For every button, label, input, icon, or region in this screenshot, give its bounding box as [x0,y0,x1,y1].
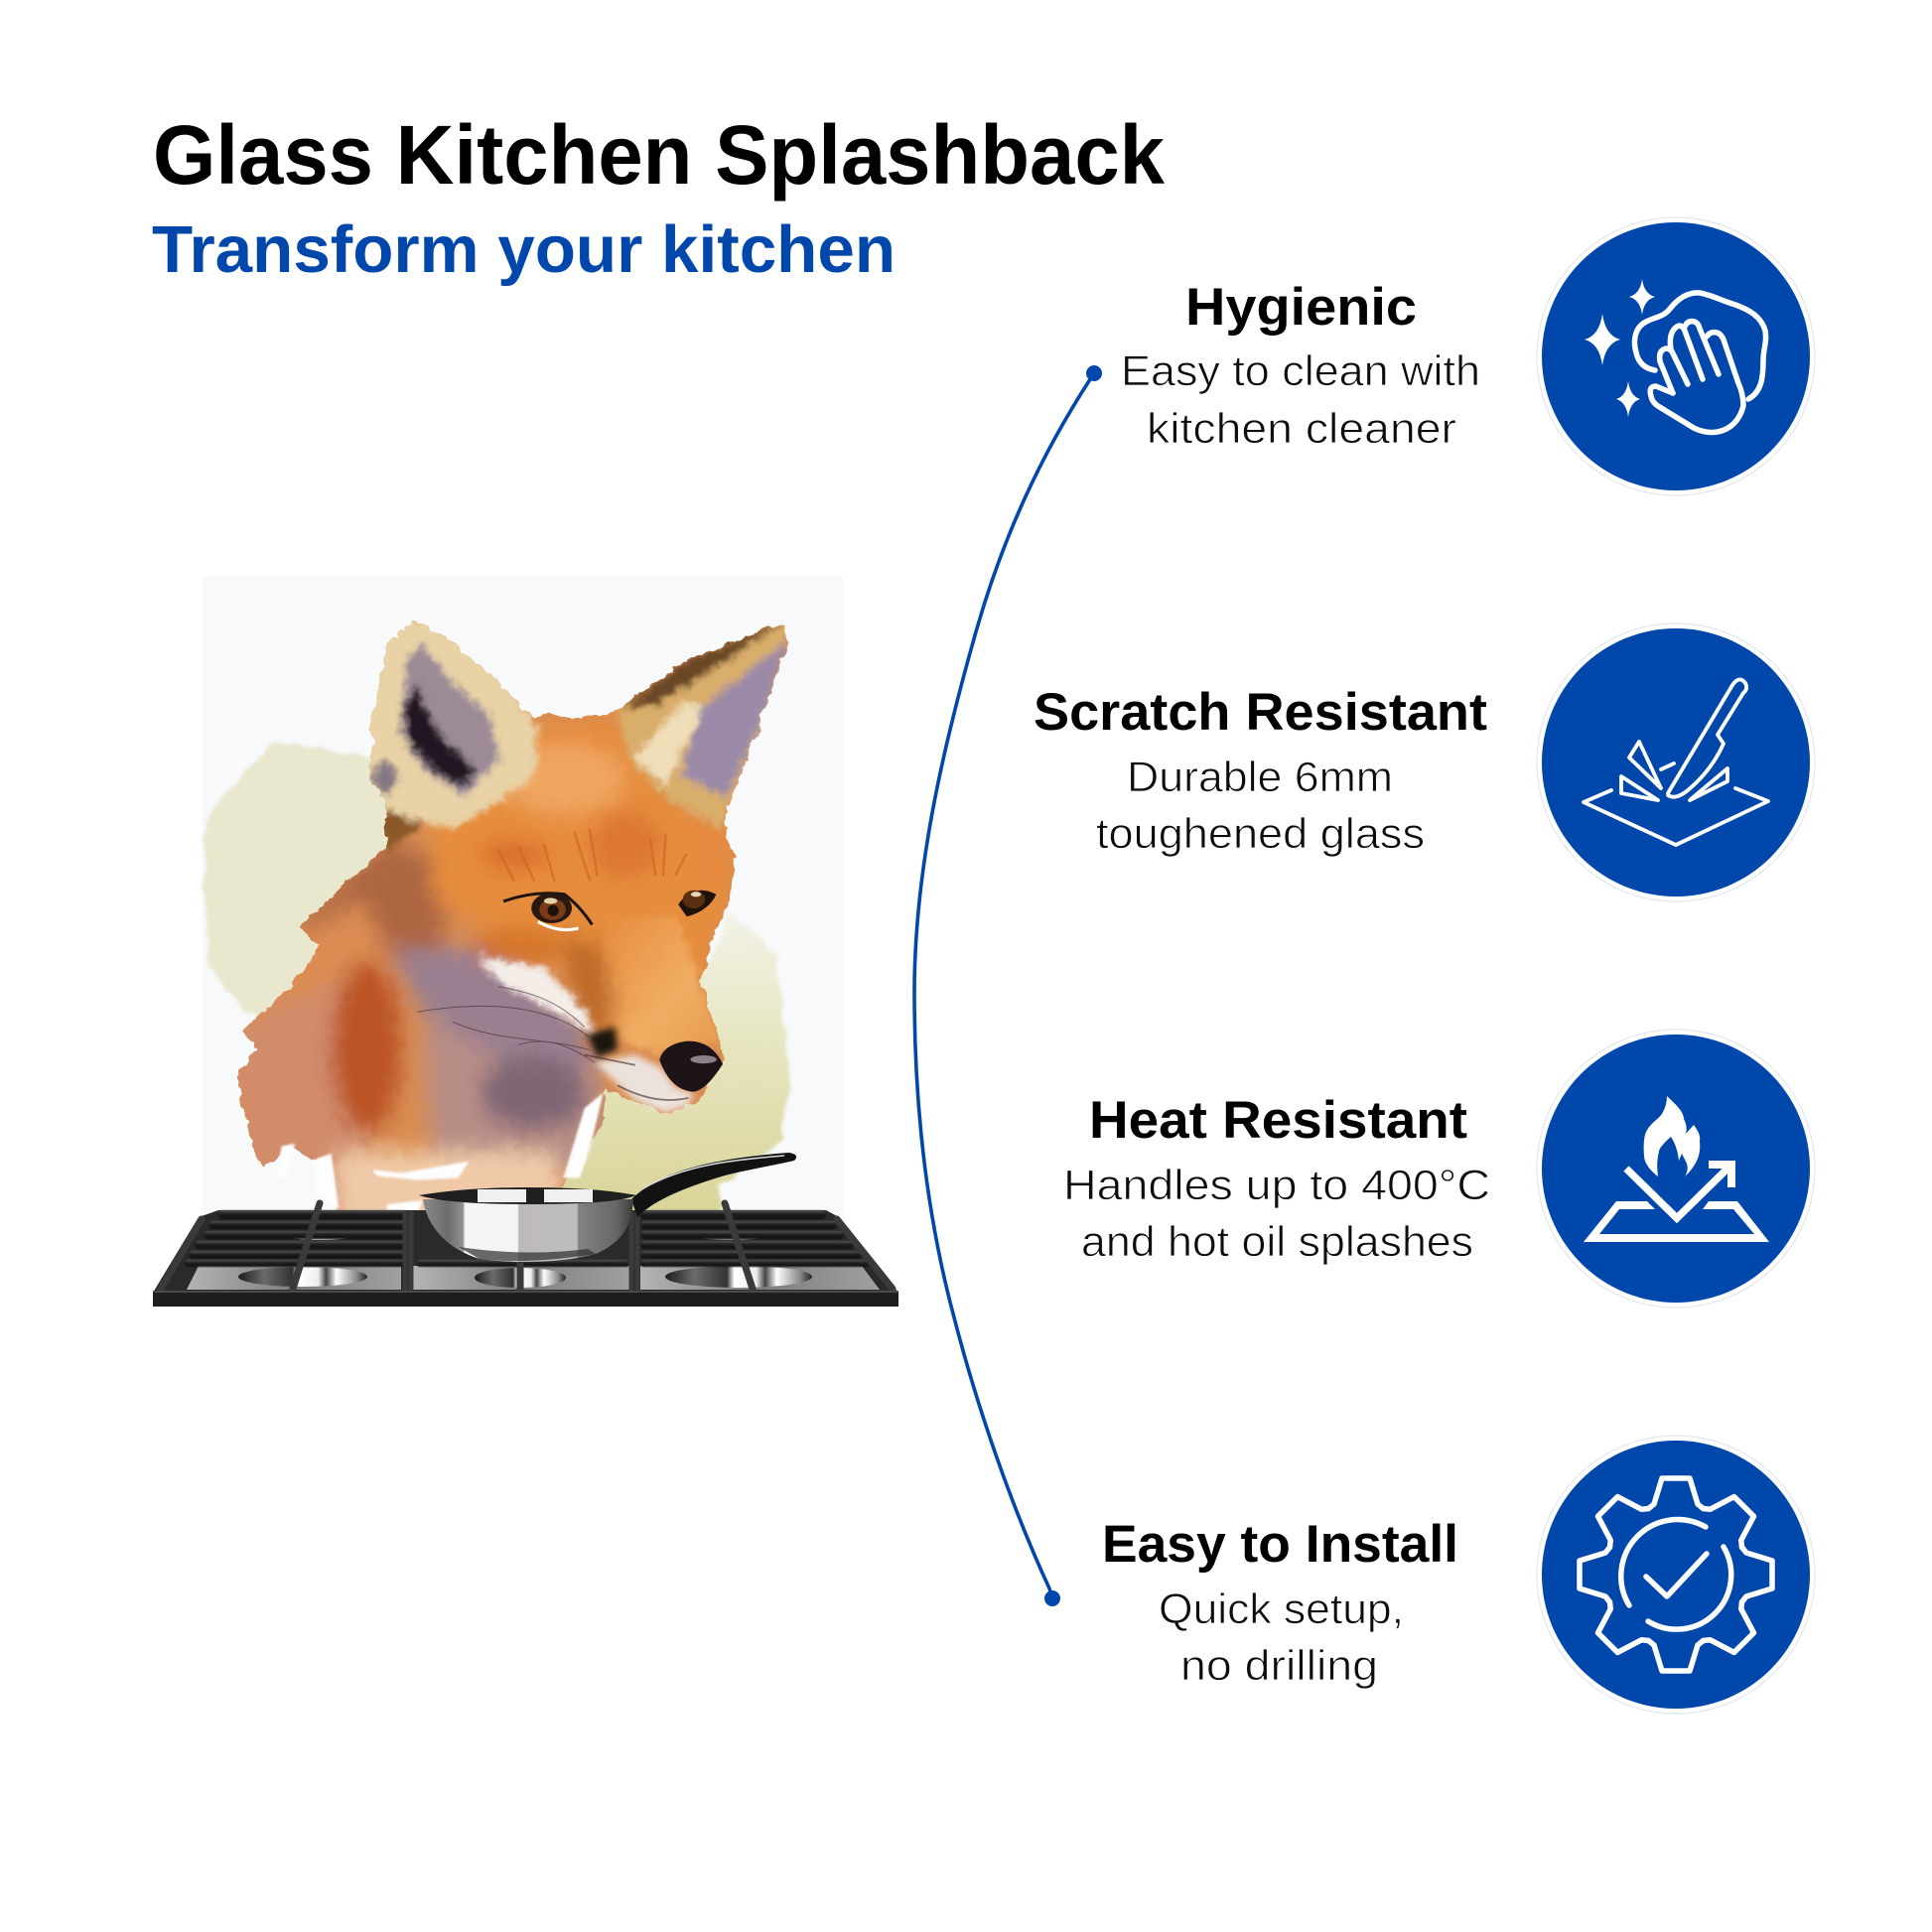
right ear [618,617,792,830]
white cheek [479,956,598,1039]
nose [659,1041,723,1092]
white paint gaps [277,1093,604,1214]
feature: Easy to Install: Easy to Install [1102,1515,1458,1574]
fox silhouette with soft colour fields [236,620,788,1210]
fox snout [600,913,722,1055]
icon: gear with check mark [1537,1436,1815,1714]
muzzle [585,1027,693,1113]
feature: Easy to Install [1102,1515,1458,1690]
fox artwork panel [201,620,794,1210]
forehead fur [498,830,686,881]
icon: flame over glass with deflecting arrow [1537,1030,1815,1308]
feature: Scratch Resistant: toughened glass [1096,810,1425,858]
hob chrome windows [187,1266,880,1290]
feature: Scratch Resistant [1034,683,1487,858]
frying pan [419,1153,796,1262]
feature: Scratch Resistant: Durable 6mm [1127,754,1393,801]
grate bars [185,1210,869,1267]
feature: Hygienic: kitchen cleaner [1147,405,1456,453]
product image: fox splashback above a gas hob [153,575,898,1307]
feature: Easy to Install: Quick setup, [1159,1586,1404,1633]
feature: Heat Resistant: Handles up to 400°C [1063,1162,1490,1209]
pan handle [631,1153,796,1217]
feature: Hygienic: Hygienic [1185,278,1417,337]
feature: Heat Resistant [1063,1091,1490,1266]
burners [238,1232,812,1288]
hob front edge [153,1291,898,1307]
feature: Hygienic [1121,278,1480,453]
whiskers [417,987,595,1062]
feature: Easy to Install: no drilling [1180,1642,1378,1690]
gas hob [153,1203,898,1307]
feature: Heat Resistant: Heat Resistant [1089,1091,1467,1150]
pan body [423,1199,633,1262]
right eye [678,891,716,916]
feature: Hygienic: Easy to clean with [1121,347,1480,395]
pan rim [419,1187,636,1204]
connector curve with end dots [914,365,1102,1606]
grate frame uprights [161,1203,893,1289]
watercolour green wash [204,744,789,1214]
left eye [503,893,592,930]
hob dark base [153,1210,898,1293]
subtitle: Transform your kitchen [152,212,896,287]
feature: Heat Resistant: and hot oil splashes [1081,1218,1473,1266]
left ear [361,617,539,852]
title: Glass Kitchen Splashback [153,108,1165,202]
icon: hand wiping with cloth and sparkles [1537,217,1815,495]
feature: Scratch Resistant: Scratch Resistant [1034,683,1487,742]
glass splashback panel [203,575,843,1216]
icon: knife scratching glass [1537,623,1815,901]
